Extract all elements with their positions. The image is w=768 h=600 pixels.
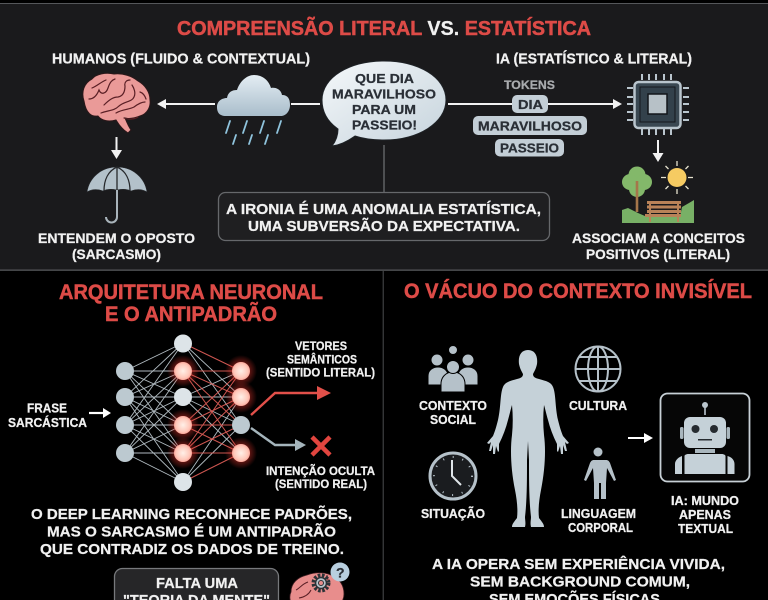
speech bubble: QUE DIA: [355, 71, 415, 86]
tokens: [473, 80, 587, 156]
heading: vacuo do contexto: O VÁCUO DO CONTEXTO INVISÍVEL: [404, 280, 752, 303]
connector: cloud to bubble: [291, 103, 320, 105]
label: associam: [572, 231, 745, 262]
label: vetores semanticos: SEMÂNTICOS: [287, 354, 357, 366]
label: cultura: CULTURA: [569, 399, 627, 413]
label: IA mundo apenas textual: APENAS: [679, 508, 731, 522]
neural network: [116, 334, 257, 491]
label: associam: ASSOCIAM A CONCEITOS: [572, 231, 745, 246]
label: IA mundo apenas textual: TEXTUAL: [678, 522, 733, 536]
callout: ironia: [218, 192, 550, 240]
panel divider bottom: [383, 271, 384, 600]
icon: microchip: [627, 74, 689, 135]
label: entendem o oposto: (SARCASMO): [72, 247, 161, 262]
arrow: human to robot: [628, 433, 653, 443]
label: vetores semanticos: [266, 341, 375, 380]
label: frase sarcastica: FRASE: [27, 402, 67, 416]
text: deep learning: QUE CONTRADIZ OS DADOS DE TREINO.: [40, 541, 344, 558]
icon: robot in frame: [660, 394, 750, 482]
icon: small person: [584, 448, 616, 499]
label: linguagem corporal: [561, 507, 636, 535]
text: deep learning: O DEEP LEARNING RECONHECE PADRÕES,: [31, 505, 352, 523]
label: entendem o oposto: ENTENDEM O OPOSTO: [38, 231, 195, 246]
icon: globe: [576, 346, 620, 392]
label: entendem o oposto: [38, 231, 195, 262]
label: situacao: SITUAÇÃO: [421, 506, 485, 521]
label: intencao oculta: INTENÇÃO OCULTA: [266, 465, 375, 478]
text: deep learning: MAS O SARCASMO É UM ANTIPADRÃO: [47, 523, 336, 541]
label: associam: POSITIVOS (LITERAL): [586, 247, 730, 262]
label: frase sarcastica: SARCÁSTICA: [8, 415, 87, 430]
icon: red cross: [312, 437, 330, 455]
tokens: MARAVILHOSO: [478, 118, 582, 134]
text: IA opera: A IA OPERA SEM EXPERIÊNCIA VIVIDA,: [432, 555, 725, 573]
heading: arquitetura neuronal: ARQUITETURA NEURONAL: [59, 281, 323, 304]
heading: arquitetura neuronal: [59, 281, 323, 326]
text: IA opera: [432, 555, 725, 600]
heading: IA: IA (ESTATÍSTICO & LITERAL): [496, 50, 692, 68]
speech bubble: [322, 61, 446, 146]
label: IA mundo apenas textual: IA: MUNDO: [671, 494, 739, 508]
speech bubble: PASSEIO!: [352, 118, 417, 132]
speech bubble: PARA UM: [352, 102, 416, 117]
icon: brain with gear and question: ?: [336, 564, 345, 580]
arrow: blocked output: [251, 428, 306, 451]
label: contexto social: SOCIAL: [430, 413, 476, 427]
label: intencao oculta: (SENTIDO REAL): [275, 479, 367, 491]
heading: arquitetura neuronal: E O ANTIPADRÃO: [105, 303, 277, 326]
speech bubble: MARAVILHOSO: [332, 87, 436, 102]
label: linguagem corporal: CORPORAL: [568, 521, 633, 535]
label: intencao oculta: [266, 465, 375, 491]
callout: ironia: UMA SUBVERSÃO DA EXPECTATIVA.: [248, 217, 520, 235]
callout: ironia: A IRONIA É UMA ANOMALIA ESTATÍSTICA,: [226, 201, 541, 218]
tokens: DIA: [518, 97, 544, 112]
label: contexto social: [419, 399, 487, 427]
arrow: chip to park: [652, 140, 664, 162]
text: deep learning: [31, 505, 352, 558]
icon: brain: [83, 73, 150, 133]
callout: teoria da mente: [114, 568, 278, 600]
label: vetores semanticos: VETORES: [295, 341, 347, 353]
icon: park bench, tree and sun: [622, 161, 694, 223]
icon: umbrella: [87, 167, 147, 223]
tokens: PASSEIO: [500, 140, 559, 156]
label: vetores semanticos: (SENTIDO LITERAL): [266, 368, 375, 380]
callout: teoria da mente: FALTA UMA: [156, 575, 238, 592]
label: linguagem corporal: LINGUAGEM: [561, 507, 636, 521]
arrow: brain to umbrella: [111, 137, 122, 159]
connector: bubble to callout: [383, 145, 385, 192]
icon: brain with gear and question: [290, 562, 350, 600]
arrow: cloud to brain: [157, 99, 215, 109]
icon: human silhouette: [487, 350, 569, 527]
heading: humanos: HUMANOS (FLUIDO & CONTEXTUAL): [52, 52, 310, 68]
arrow: bubble to chip: [448, 99, 622, 109]
icon: clock: [430, 453, 476, 499]
label: frase sarcastica: [8, 402, 87, 430]
label: contexto social: CONTEXTO: [419, 399, 487, 413]
arrow: input: [89, 408, 111, 418]
title: COMPREENSÃO LITERAL VS. ESTATÍSTICA: [177, 17, 591, 40]
icon: people group: [428, 346, 478, 392]
icon: rain cloud: [217, 75, 290, 144]
text: IA opera: SEM BACKGROUND COMUM,: [470, 574, 690, 591]
label: IA mundo apenas textual: [671, 494, 739, 536]
tokens: TOKENS: [504, 80, 555, 92]
panel: top comparison: [0, 0, 768, 272]
arrow: literal output: [251, 386, 331, 415]
